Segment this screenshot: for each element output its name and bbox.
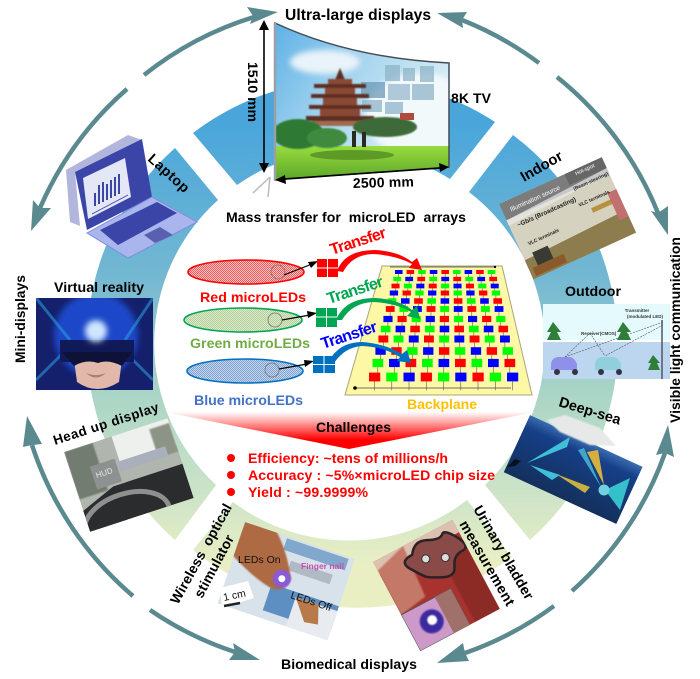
arrow: towards biomedical displays from left — [150, 610, 260, 660]
heading: visible light communication: Visible light communication — [667, 237, 683, 423]
text: transmitter: Transmitter — [625, 308, 649, 313]
text: broadcasting: ~Gb/s (Broadcasting) — [516, 196, 577, 229]
text: receiver: Receiver(CMOS) — [581, 331, 617, 336]
text: efficiency: Efficiency: ~tens of millions/h — [248, 450, 448, 466]
label: indoor: Indoor — [518, 148, 566, 185]
arrow: mini-displays to ultra-large displays — [144, 7, 278, 75]
laptop base — [87, 197, 197, 258]
list: challenges — [227, 450, 495, 500]
vertical dimension arrow — [259, 20, 269, 173]
ring segment: mini-displays — [87, 148, 218, 540]
label: 8K TV: 8K TV — [451, 90, 492, 106]
label: backplane: Backplane — [407, 396, 477, 412]
label: 2500 mm: 2500 mm — [353, 173, 414, 191]
light beams — [527, 437, 570, 463]
label: blue microLEDs: Blue microLEDs — [194, 393, 303, 409]
label: virtual reality: Virtual reality — [54, 280, 144, 296]
tv screen — [276, 24, 448, 180]
label: green microLEDs: Green microLEDs — [190, 336, 310, 352]
label: blue transfer: Transfer — [319, 319, 379, 353]
heading: ultra-large displays: Ultra-large displays — [285, 7, 431, 24]
label: outdoor: Outdoor — [565, 284, 621, 300]
arrow: biomedical to mini-displays — [23, 416, 133, 596]
label: laptop: Laptop — [144, 151, 192, 197]
arrow: biomedical to visible light communication — [572, 425, 674, 591]
text: VLC terminals: VLC terminals — [527, 228, 560, 247]
text: yield: Yield : ~99.9999% — [248, 484, 368, 500]
laptop chart bars — [95, 174, 119, 206]
label: wireless optical stimulator: Wireless optical — [167, 501, 235, 606]
image: outdoor visible light communication — [543, 304, 670, 379]
arrow: green transfer — [336, 298, 420, 320]
text: finger nail: Finger nail — [301, 561, 344, 571]
label: deep-sea: Deep-sea — [557, 395, 624, 429]
image: 8K TV — [252, 20, 450, 197]
scale box — [220, 581, 254, 608]
text: beam steering: (Beam-steering) — [573, 171, 610, 192]
image: virtual reality — [36, 293, 153, 390]
bullet: accuracy — [227, 471, 235, 479]
text: 1 cm: 1 cm — [222, 587, 247, 604]
hud label: HUD — [95, 466, 114, 480]
arrow: towards mini-displays — [31, 89, 127, 231]
arrow: towards biomedical displays from right — [437, 606, 554, 663]
label: urinary bladder measurement: measurement — [456, 518, 518, 609]
arrow: towards ultra-large displays from right — [437, 12, 539, 63]
panel: backplane — [345, 266, 532, 395]
horizontal dimension arrow — [275, 163, 449, 184]
laptop screen — [83, 158, 131, 219]
text: LEDs Off: LEDs Off — [289, 589, 333, 614]
heading: biomedical displays: Biomedical displays — [281, 656, 417, 672]
challenges funnel — [165, 412, 535, 449]
diver — [507, 459, 521, 467]
image: head up display — [64, 418, 194, 532]
ring segment: ultra-large displays — [193, 79, 495, 185]
image: deep-sea — [504, 415, 643, 524]
icon: laptop — [66, 135, 197, 258]
text: LEDs On: LEDs On — [238, 554, 281, 566]
laptop keyboard — [100, 202, 177, 245]
label: wireless optical stimulator: stimulator — [191, 531, 237, 600]
text: modulated LED: (modulated LED) — [627, 314, 663, 319]
text: hot-spot source: Hot-spot — [574, 163, 596, 177]
scale bar — [224, 603, 240, 606]
ring segment: biomedical displays — [193, 500, 512, 608]
laptop touchpad — [144, 227, 173, 243]
panel: red microLED wafer — [188, 259, 338, 284]
tv stand — [253, 177, 270, 197]
label: 1510 mm: 1510 mm — [245, 62, 261, 122]
heading: mini-displays: Mini-displays — [12, 275, 28, 363]
bullet: yield — [227, 488, 235, 496]
image: urinary bladder measurement — [373, 520, 500, 651]
label: red transfer: Transfer — [328, 225, 388, 259]
text: illumination source: Illumination source — [509, 184, 562, 213]
laptop lid — [75, 139, 152, 230]
ship — [547, 415, 616, 446]
label: urinary bladder measurement: Urinary bladder — [470, 503, 537, 603]
label: head up display: Head up display — [51, 399, 161, 448]
panel: green microLED wafer — [184, 308, 337, 332]
arrow: red transfer — [337, 250, 422, 272]
text: accuracy: Accuracy : ~5%×microLED chip size — [248, 467, 495, 483]
bullet: efficiency — [227, 454, 235, 462]
arrow: blue transfer — [328, 342, 411, 363]
text: VLC terminal: VLC terminals — [578, 189, 611, 209]
arrow: towards visible light communication — [557, 77, 668, 235]
image: indoor visible light communication — [499, 157, 636, 280]
ring segment: visible light communication — [469, 135, 618, 540]
central white disc title: Mass transfer for microLED arrays — [226, 209, 466, 225]
label: red microLEDs: Red microLEDs — [200, 290, 306, 306]
panel: blue microLED wafer — [187, 356, 335, 383]
laptop back plate — [66, 135, 142, 226]
label: green transfer: Transfer — [325, 274, 385, 308]
label: challenges: Challenges — [316, 419, 391, 435]
image: wireless optical stimulator — [216, 519, 356, 641]
tv frame — [275, 23, 449, 180]
LED array — [369, 270, 518, 390]
